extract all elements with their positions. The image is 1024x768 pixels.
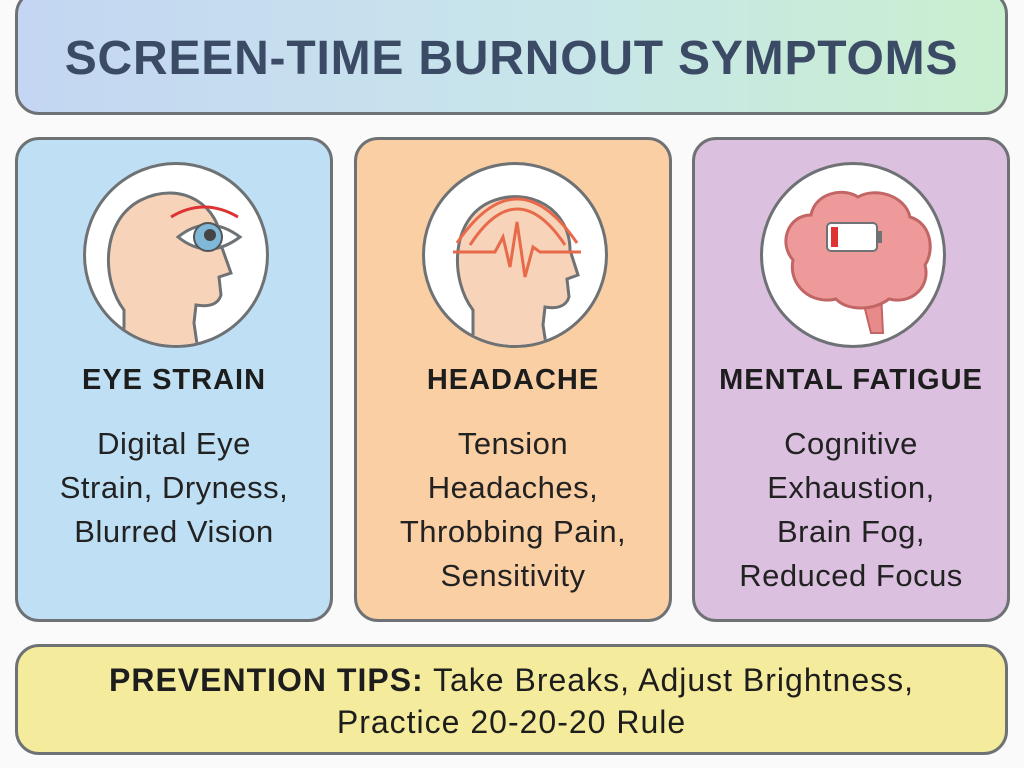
text: Cognitive	[784, 426, 918, 461]
heading: MENTAL FATIGUE	[719, 364, 983, 396]
icon: brain with low battery	[760, 162, 946, 348]
prevention tips: PREVENTION TIPS: Take Breaks, Adjust Brightness,	[109, 662, 914, 698]
title	[15, 0, 1008, 115]
heading: HEADACHE	[427, 364, 599, 396]
text: Tension	[458, 426, 568, 461]
icon: head with eye	[83, 162, 269, 348]
text: Exhaustion,	[767, 470, 935, 505]
prevention tips	[15, 644, 1008, 755]
text: Reduced Focus	[739, 558, 963, 593]
text	[60, 426, 288, 549]
text: Sensitivity	[440, 558, 586, 593]
panel: mental fatigue	[692, 137, 1010, 622]
text: Blurred Vision	[74, 514, 274, 549]
icon: head with pulse	[422, 162, 608, 348]
text: Brain Fog,	[777, 514, 925, 549]
text: Headaches,	[428, 470, 598, 505]
title: SCREEN-TIME BURNOUT SYMPTOMS	[65, 32, 958, 85]
text	[400, 426, 626, 593]
heading: EYE STRAIN	[82, 364, 266, 396]
text	[739, 426, 963, 593]
panel: eye strain	[15, 137, 333, 622]
text: Strain, Dryness,	[60, 470, 288, 505]
text: Digital Eye	[97, 426, 251, 461]
panel: headache	[354, 137, 672, 622]
text: Throbbing Pain,	[400, 514, 626, 549]
prevention tips: Practice 20-20-20 Rule	[337, 704, 686, 740]
